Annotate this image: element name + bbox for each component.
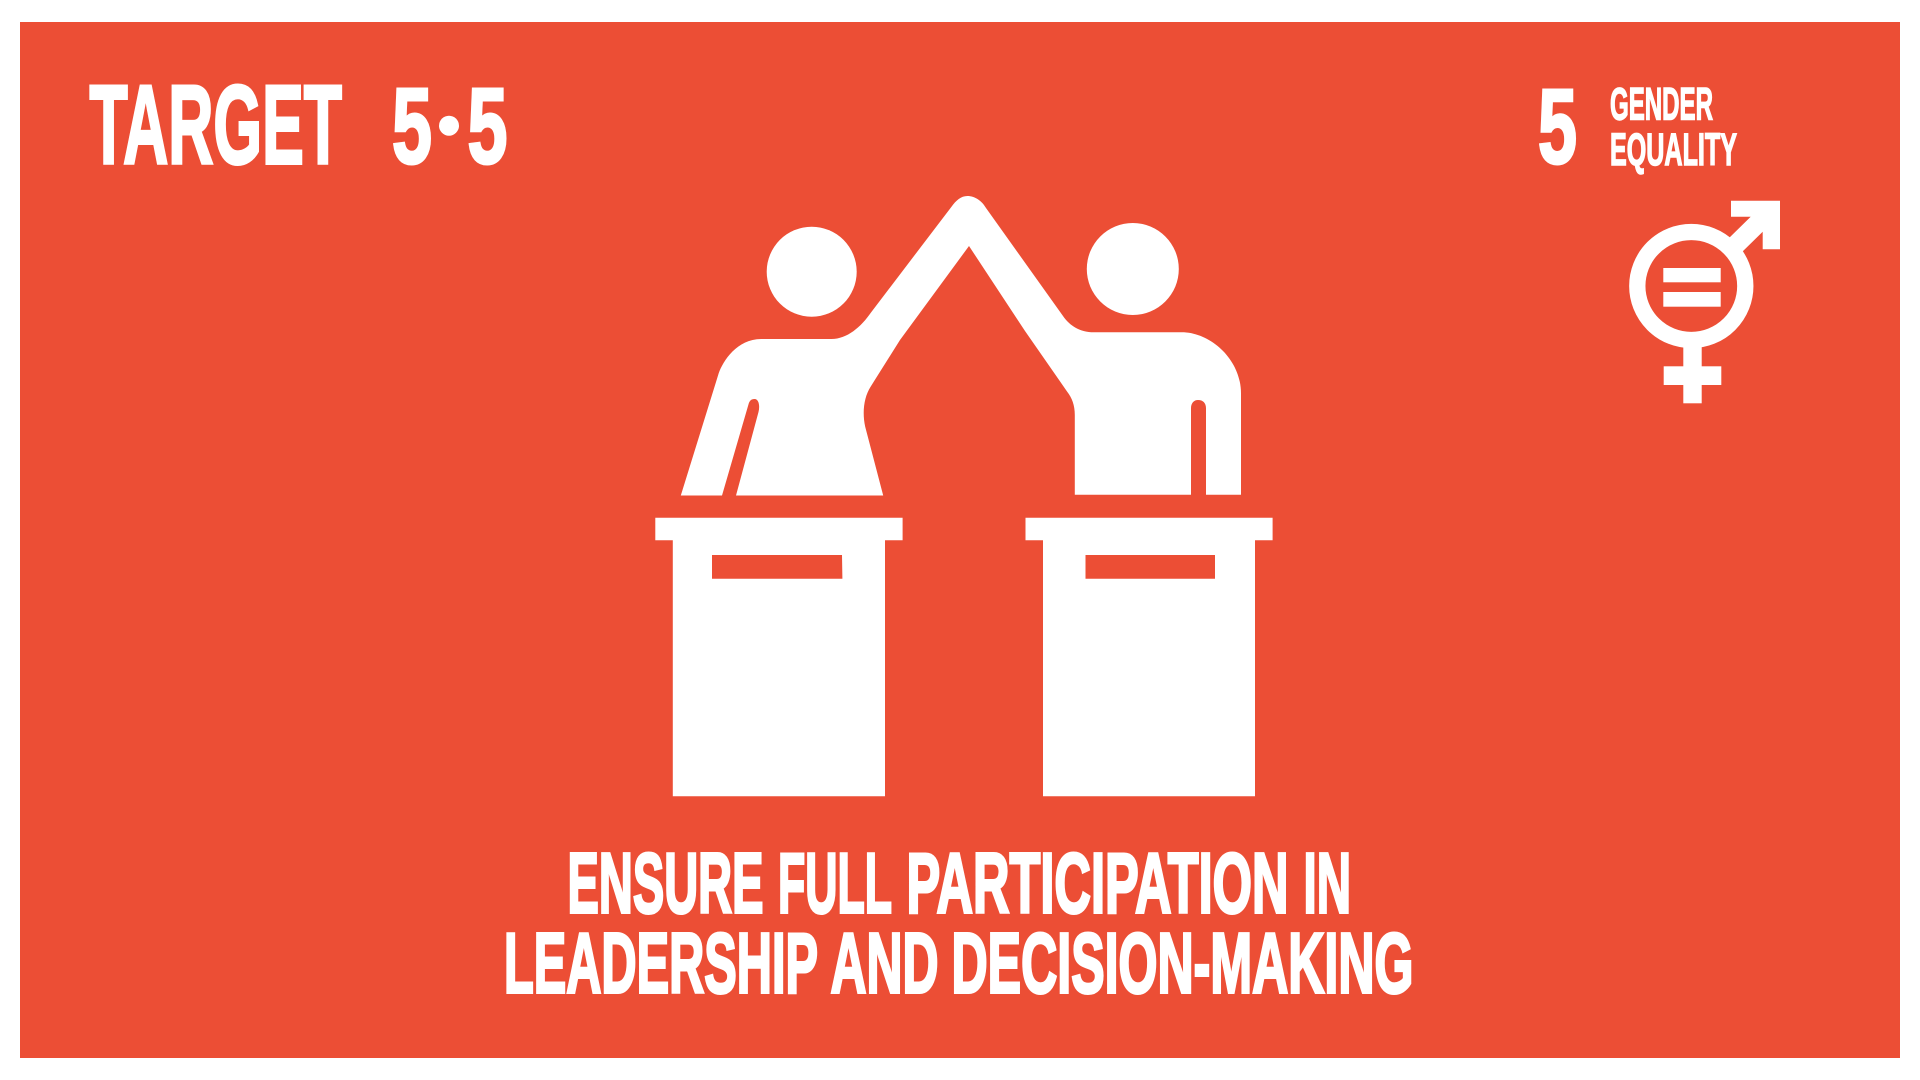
goal label: 5 gender equality: GENDER bbox=[1610, 78, 1713, 130]
caption: target description: FULL bbox=[778, 837, 892, 932]
icon: left person head bbox=[767, 227, 857, 317]
title: target number: 5 bbox=[468, 65, 508, 186]
icon: gender equality symbol bbox=[1637, 201, 1780, 403]
caption: target description: PARTICIPATION bbox=[906, 837, 1288, 932]
icon: right podium bbox=[1026, 518, 1273, 796]
goal label: 5 gender equality: 5 bbox=[1538, 68, 1577, 186]
title: target number: 5 bbox=[392, 65, 432, 186]
caption: target description: AND bbox=[830, 917, 938, 1012]
caption: target description: DECISION-MAKING bbox=[952, 917, 1414, 1012]
title: target number: TARGET bbox=[90, 62, 342, 188]
caption: target description bbox=[504, 837, 1414, 1012]
icon: left podium bbox=[655, 518, 903, 796]
goal label: 5 gender equality bbox=[1538, 68, 1737, 186]
caption: target description: IN bbox=[1304, 837, 1351, 932]
caption: target description: ENSURE bbox=[568, 837, 764, 932]
icon: right person head bbox=[1087, 223, 1179, 315]
icon: two bodies with joined raised arms bbox=[681, 196, 1241, 496]
caption: target description: LEADERSHIP bbox=[504, 917, 818, 1012]
illustration: two people high-fiving at podiums bbox=[655, 196, 1273, 796]
goal label: 5 gender equality: EQUALITY bbox=[1610, 124, 1737, 175]
